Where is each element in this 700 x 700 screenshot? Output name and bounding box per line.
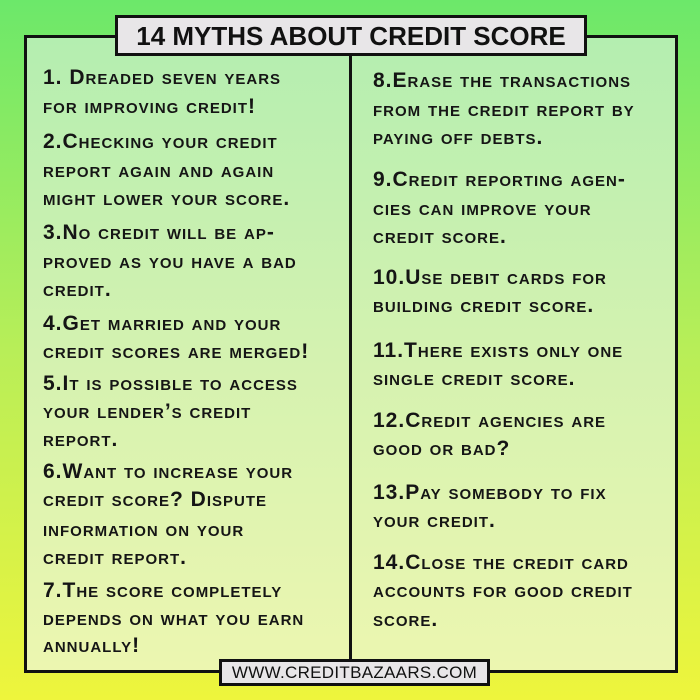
text block: right column myths: 13.Pay somebody to fix [373, 481, 607, 504]
footer: website [219, 659, 490, 686]
text block: right column myths: accounts for good credit [373, 579, 633, 602]
text block: left column myths: 2.Checking your credit [43, 130, 278, 153]
text block: left column myths: credit score? Dispute [43, 488, 267, 511]
text block: left column myths: 3.No credit will be ap- [43, 221, 275, 244]
text block: right column myths: 11.There exists only one [373, 339, 623, 362]
text block: left column myths: credit scores are merged! [43, 340, 309, 363]
text block: right column myths: credit score. [373, 225, 507, 248]
text block: left column myths: your lender’s credit [43, 400, 251, 423]
text block: right column myths: 9.Credit reporting agen- [373, 168, 626, 191]
text block: left column myths: annually! [43, 634, 140, 657]
text block: right column myths: building credit score. [373, 294, 594, 317]
text block: right column myths: good or bad? [373, 437, 510, 460]
footer: website: WWW.CREDITBAZAARS.COM [232, 663, 477, 682]
text block: right column myths: paying off debts. [373, 126, 543, 149]
text block: right column myths: single credit score. [373, 367, 576, 390]
title: 14 MYTHS ABOUT CREDIT SCORE [136, 21, 566, 51]
text block: right column myths: 14.Close the credit card [373, 551, 629, 574]
text block: left column myths: report. [43, 428, 118, 451]
text block: left column myths: might lower your score. [43, 187, 290, 210]
text block: right column myths: from the credit report by [373, 98, 635, 121]
text block: left column myths: proved as you have a bad [43, 250, 297, 273]
text block: right column myths: score. [373, 608, 438, 631]
title [115, 15, 587, 56]
text block: left column myths: report again and again [43, 159, 274, 182]
text block: left column myths: 1. Dreaded seven years [43, 66, 281, 89]
text block: left column myths [43, 66, 309, 657]
text block: left column myths: 7.The score completely [43, 579, 282, 602]
text block: right column myths: cies can improve your [373, 197, 592, 220]
text block: left column myths: for improving credit! [43, 95, 256, 118]
text block: left column myths: credit. [43, 278, 112, 301]
text block: left column myths: credit report. [43, 546, 187, 569]
text block: right column myths: 8.Erase the transactions [373, 69, 631, 92]
text block: right column myths: 10.Use debit cards for [373, 266, 607, 289]
text block: right column myths: your credit. [373, 509, 496, 532]
text block: left column myths: 5.It is possible to access [43, 372, 298, 395]
text block: left column myths: depends on what you earn [43, 607, 304, 630]
text block: right column myths [373, 69, 635, 631]
text block: right column myths: 12.Credit agencies are [373, 409, 606, 432]
text block: left column myths: 4.Get married and your [43, 312, 281, 335]
text block: left column myths: information on your [43, 518, 244, 541]
text block: left column myths: 6.Want to increase your [43, 460, 293, 483]
